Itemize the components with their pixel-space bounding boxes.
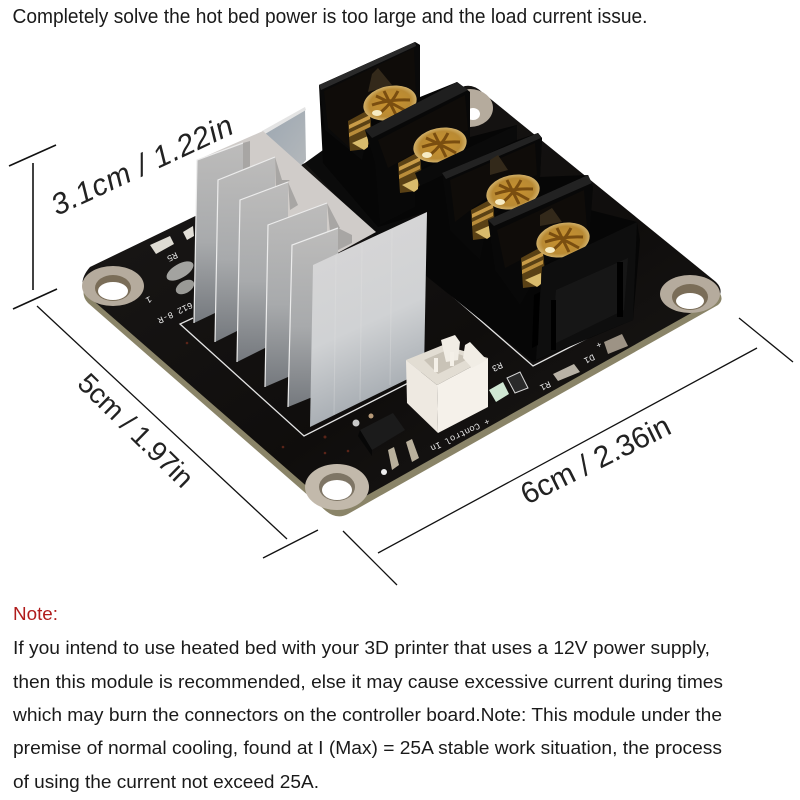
silkscreen labels: + Control In: [428, 415, 491, 453]
note body text: [12, 637, 723, 792]
silkscreen labels: 1: [144, 293, 153, 305]
terminal 2: [365, 82, 517, 225]
note heading: Note:: [13, 603, 58, 624]
dimension: width 6cm: 6cm / 2.36in: [515, 409, 676, 511]
terminal 3: [442, 133, 543, 260]
front plate: [310, 212, 427, 427]
note body text: which may burn the connectors on the controller board.Note: This module under the: [12, 704, 722, 725]
circuit board: [82, 86, 722, 516]
silkscreen labels: D1: [582, 351, 596, 365]
screw terminals: [305, 42, 640, 362]
note body text: then this module is recommended, else it may cause excessive current during times: [13, 671, 723, 692]
white connector: [406, 335, 488, 433]
headline text: Completely solve the hot bed power is too large and the load current issue.: [12, 6, 648, 28]
small components: LEDs, resistors: [150, 226, 628, 402]
drill dots: [186, 342, 349, 454]
note body text: premise of normal cooling, found at I (Max) = 25A stable work situation, the process: [13, 737, 722, 758]
silkscreen labels: 612 8-R: [155, 299, 194, 325]
silkscreen outlines: [180, 273, 627, 436]
dimension: depth 5cm: [37, 306, 318, 558]
front block face: [536, 222, 637, 360]
silkscreen labels: R3: [490, 359, 504, 373]
silkscreen labels: [144, 249, 603, 453]
product photo: power module board: [82, 42, 722, 516]
dimension: width 6cm: [343, 318, 793, 585]
dimension: depth 5cm: 5cm / 1.97in: [72, 367, 200, 494]
silkscreen labels: R5: [165, 249, 179, 263]
shaded slots between fins: [243, 141, 352, 250]
mounting holes: [82, 89, 720, 510]
silkscreen labels: R1: [538, 378, 552, 392]
silkscreen labels: +: [594, 338, 603, 350]
dimension: height 3.1cm: 3.1cm / 1.22in: [46, 109, 239, 222]
note body text: of using the current not exceed 25A.: [13, 771, 319, 792]
terminal 1: [319, 42, 420, 160]
note body text: If you intend to use heated bed with your 3D printer that uses a 12V power supply,: [13, 637, 710, 658]
control chip: [352, 413, 419, 475]
terminal 4: [488, 175, 593, 305]
dimension: height 3.1cm: [9, 109, 239, 309]
fins: [194, 143, 338, 407]
heatsink: [194, 107, 427, 427]
